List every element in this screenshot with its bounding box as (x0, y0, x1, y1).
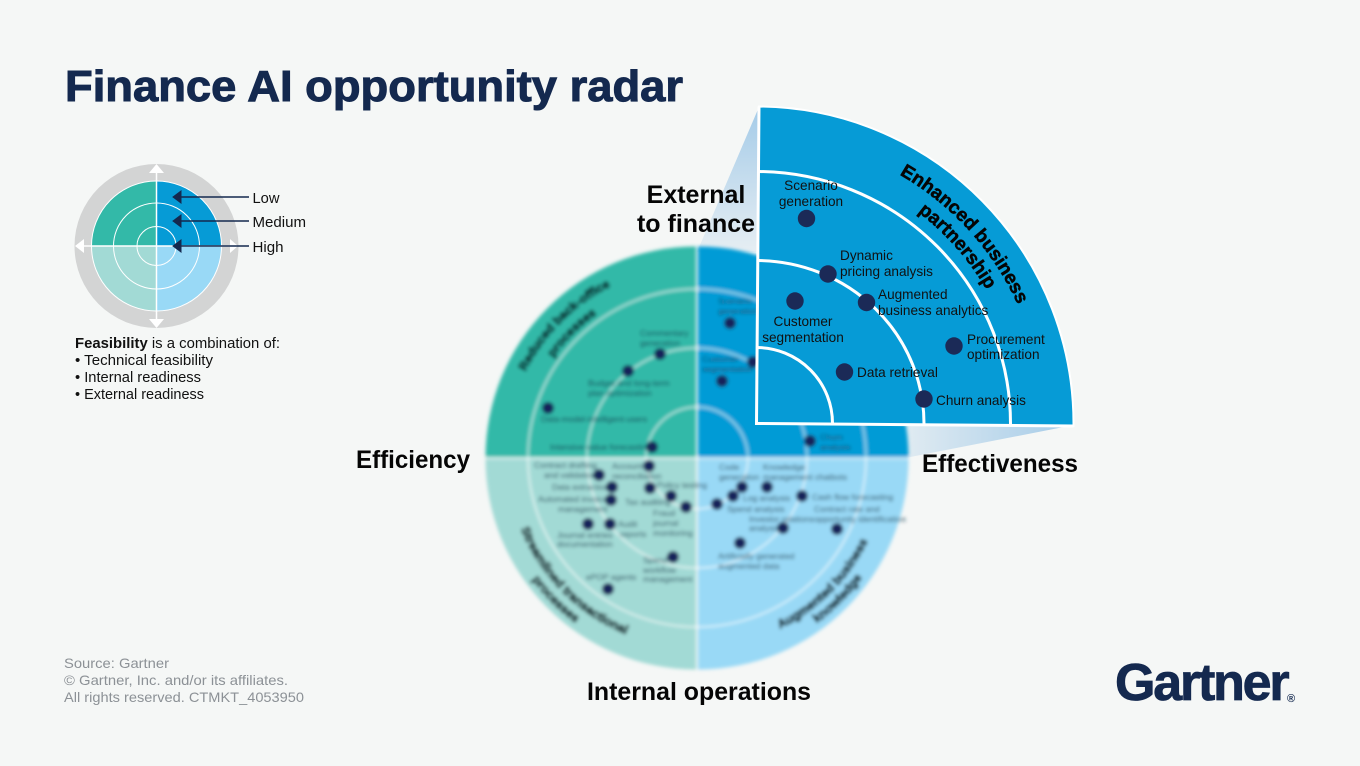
callout point labels: Churn analysis (936, 393, 1026, 408)
axis label: External to finance: to finance (637, 210, 755, 238)
radar point labels: Journal entries (557, 530, 613, 540)
radar point labels: Code (719, 462, 740, 472)
radar point labels: and validation (544, 470, 597, 480)
feasibility note: Feasibility is a combination of: (75, 336, 280, 352)
radar point labels: Automated invoice (538, 494, 608, 504)
radar point labels: Data extraction (552, 482, 609, 492)
callout point labels: segmentation (762, 330, 844, 345)
radar point labels: management (558, 504, 608, 514)
radar point labels: Policy testing (657, 480, 707, 490)
radar point labels: analysis (749, 523, 780, 533)
quadrant headings: Augmented business (776, 537, 870, 630)
radar point labels: Budget and long-term (588, 378, 670, 388)
quadrant headings: processes (528, 574, 580, 624)
Gartner logo: ® (1287, 693, 1295, 705)
callout point labels: Customer (774, 314, 833, 329)
radar point labels: Fraud (653, 508, 675, 518)
radar point labels: plan optimization (588, 388, 652, 398)
feasibility note: • External readiness (75, 387, 204, 403)
radar point labels: generation (719, 472, 759, 482)
callout heading: partnership (916, 204, 994, 288)
callout point labels: optimization (967, 347, 1040, 362)
radar point labels: reconciliation (612, 471, 662, 481)
radar point labels: Customer (702, 354, 739, 364)
radar point labels: Intensive-value forecasting (550, 442, 651, 452)
radar point labels: segmentation (702, 364, 753, 374)
callout points (786, 210, 963, 408)
callout point labels: Procurement (967, 332, 1045, 347)
quadrant: bottom-right (698, 458, 908, 670)
radar point labels: journal (652, 518, 679, 528)
axis label: External to finance: External (647, 181, 745, 209)
callout point labels: Augmented (878, 287, 948, 302)
legend quadrants (81, 170, 232, 322)
legend: feasibility radar (74, 164, 306, 328)
radar point labels: Contract drafting (534, 460, 597, 470)
radar point labels: Commentary (640, 328, 689, 338)
legend level labels: High (252, 240, 284, 256)
radar point labels: ePOP agents (586, 572, 636, 582)
radar point labels: generation (718, 306, 758, 316)
quadrant headings: Streamlined transactional (520, 524, 631, 636)
legend pointers (173, 191, 249, 252)
feasibility note: • Technical feasibility (75, 353, 214, 369)
feasibility note: • Internal readiness (75, 370, 201, 386)
feasibility note (75, 336, 280, 403)
quadrant headings: knowledge (810, 573, 864, 624)
radar point labels: management chatbots (763, 472, 847, 482)
callout point labels: Dynamic (840, 248, 893, 263)
callout point labels: Scenario (784, 178, 838, 193)
callout point labels: generation (779, 194, 843, 209)
quadrant headings (516, 280, 870, 636)
radar point labels: Spend (643, 555, 668, 565)
radar rings and axes (485, 289, 909, 627)
callout point labels (762, 178, 1045, 408)
axis label: Effectiveness: Effectiveness (922, 450, 1078, 478)
radar point labels: analysis (820, 442, 851, 452)
radar point labels (534, 296, 906, 584)
radar point labels: Contract rate and (814, 504, 880, 514)
radar point labels: augmented data (718, 561, 780, 571)
zoom wedge: top (697, 107, 759, 252)
quadrant: bottom-left (486, 458, 696, 670)
callout quadrant: Enhanced business partnership (755, 106, 1074, 428)
main radar (blurred) (482, 244, 912, 672)
radar point labels: monitoring (653, 528, 693, 538)
radar point labels: generation (640, 338, 680, 348)
radar point labels: Investor relations (749, 514, 814, 524)
axis label: Internal operations: Internal operations (587, 678, 811, 706)
callout point labels: pricing analysis (840, 264, 933, 279)
callout rings (756, 107, 1076, 426)
callout shape (756, 107, 1076, 426)
radar point labels: Log analysis (743, 493, 790, 503)
quadrant: top-right (698, 246, 908, 458)
radar point labels: Account (612, 461, 643, 471)
legend level labels: Medium (252, 215, 306, 231)
radar point labels: management (643, 574, 693, 584)
radar point labels: documentation (557, 539, 613, 549)
radar points (542, 317, 843, 595)
quadrant headings: Reduced back-office (516, 280, 612, 372)
axis label: External to finance (637, 181, 755, 238)
title: Finance AI opportunity radar (65, 62, 683, 111)
legend axis arrows (75, 164, 238, 328)
radar point labels: reports (620, 529, 646, 539)
source note: Source: Gartner (64, 655, 169, 671)
radar point labels: Cash flow forecasting (812, 492, 894, 502)
legend level labels (252, 191, 306, 256)
radar point labels: Scenario (718, 296, 752, 306)
radar point labels: Knowledge (763, 462, 805, 472)
radar point labels: Churn (820, 432, 843, 442)
callout point labels: business analytics (878, 303, 989, 318)
radar point labels: Tax auditing (625, 497, 671, 507)
source note (64, 655, 304, 705)
quadrant headings: processes (547, 308, 598, 360)
radar point labels: workflow (642, 565, 677, 575)
radar point labels: Spend analysis (727, 504, 785, 514)
legend level labels: Low (252, 191, 280, 207)
Gartner logo: Gartner (1115, 654, 1289, 712)
radar point labels: Artificially generated (718, 551, 795, 561)
callout point labels: Data retrieval (857, 365, 938, 380)
legend outer ring (74, 164, 238, 328)
zoom wedge: right (900, 423, 1074, 459)
radar point labels: opportunity identification (814, 514, 906, 524)
source note: All rights reserved. CTMKT_4053950 (64, 689, 304, 705)
quadrant: top-left (486, 246, 696, 458)
axis label: Efficiency: Efficiency (356, 446, 470, 474)
radar point labels: Data-model-intelligent-users (541, 414, 647, 424)
callout heading: Enhanced business (900, 164, 1026, 304)
radar point labels: Audit (618, 519, 638, 529)
source note: © Gartner, Inc. and/or its affiliates. (64, 672, 288, 688)
